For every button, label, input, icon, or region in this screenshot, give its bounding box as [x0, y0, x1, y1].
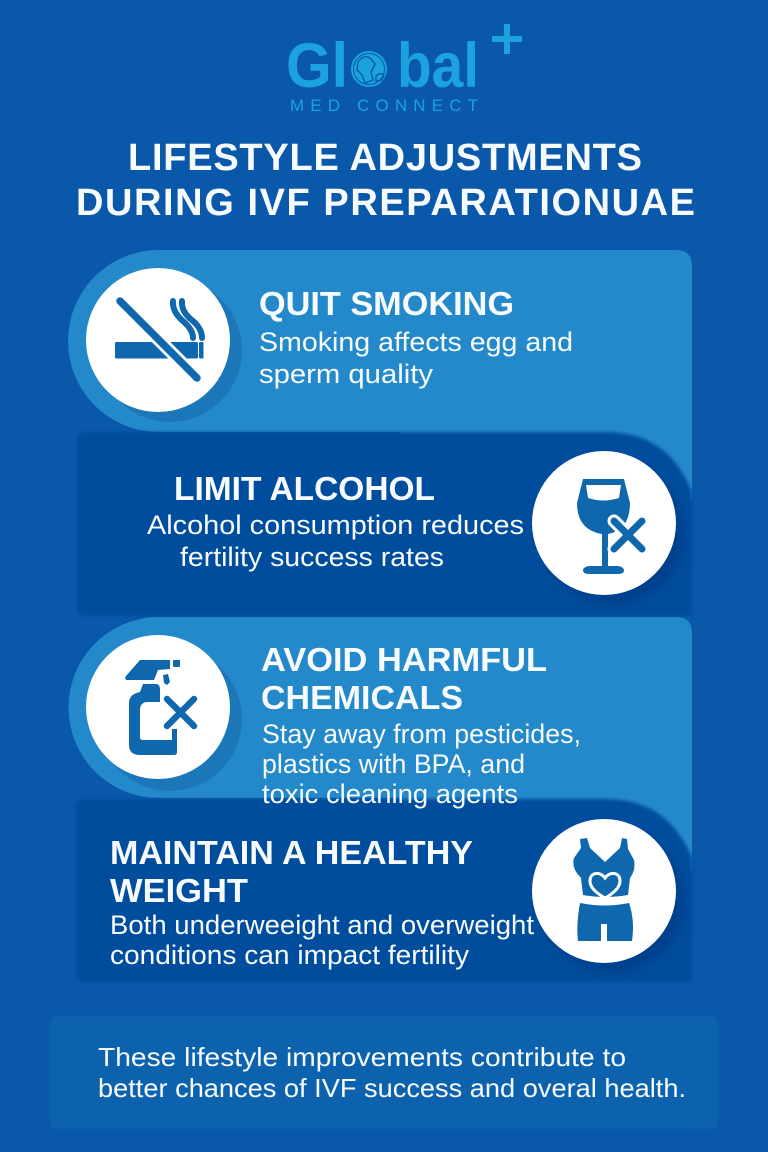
logo: MED CONNECT	[290, 96, 478, 115]
panel: limit alcohol background	[77, 432, 692, 616]
logo plus sign	[492, 24, 522, 54]
avoid chemicals text: toxic cleaning agents	[262, 779, 518, 809]
logo	[286, 24, 522, 115]
maintain weight text: MAINTAIN A HEALTHY	[110, 834, 473, 871]
panel: maintain weight background	[76, 799, 692, 982]
panel: summary: These lifestyle improvements contribute to	[98, 1042, 626, 1072]
heart waist	[590, 873, 620, 898]
body top	[573, 838, 634, 897]
quit smoking text: sperm quality	[259, 359, 434, 389]
icon: healthy weight	[532, 819, 684, 973]
icon: globe in logo	[351, 51, 387, 87]
title: DURING IVF PREPARATIONUAE	[76, 182, 695, 224]
limit alcohol text: LIMIT ALCOHOL	[174, 470, 435, 507]
limit alcohol text: Alcohol consumption reduces	[147, 510, 524, 540]
maintain weight text	[110, 834, 534, 970]
icon: no smoking	[86, 268, 242, 422]
logo: Gl	[286, 31, 348, 101]
panel: quit smoking background	[68, 250, 692, 500]
maintain weight text: conditions can impact fertility	[110, 940, 470, 970]
limit alcohol text: fertility success rates	[180, 542, 444, 572]
avoid chemicals text: plastics with BPA, and	[262, 749, 525, 779]
avoid chemicals text	[261, 641, 581, 809]
panel: summary: better chances of IVF success and overal health.	[98, 1073, 686, 1103]
panel: avoid chemicals background	[69, 617, 692, 870]
maintain weight text: WEIGHT	[110, 872, 248, 909]
icon: no alcohol	[532, 451, 684, 605]
quit smoking text: QUIT SMOKING	[259, 285, 514, 322]
maintain weight text: Both underweeight and overweight	[110, 910, 534, 940]
shorts	[577, 903, 633, 941]
logo: bal	[397, 31, 479, 101]
title	[76, 137, 695, 224]
quit smoking text	[259, 285, 573, 389]
limit alcohol text	[147, 470, 524, 572]
quit smoking text: Smoking affects egg and	[259, 327, 573, 357]
title: LIFESTYLE ADJUSTMENTS	[128, 137, 642, 179]
icon: no chemicals	[86, 635, 242, 791]
avoid chemicals text: AVOID HARMFUL	[261, 641, 547, 678]
avoid chemicals text: Stay away from pesticides,	[262, 719, 581, 749]
panel: summary	[50, 1016, 718, 1129]
avoid chemicals text: CHEMICALS	[261, 679, 463, 716]
